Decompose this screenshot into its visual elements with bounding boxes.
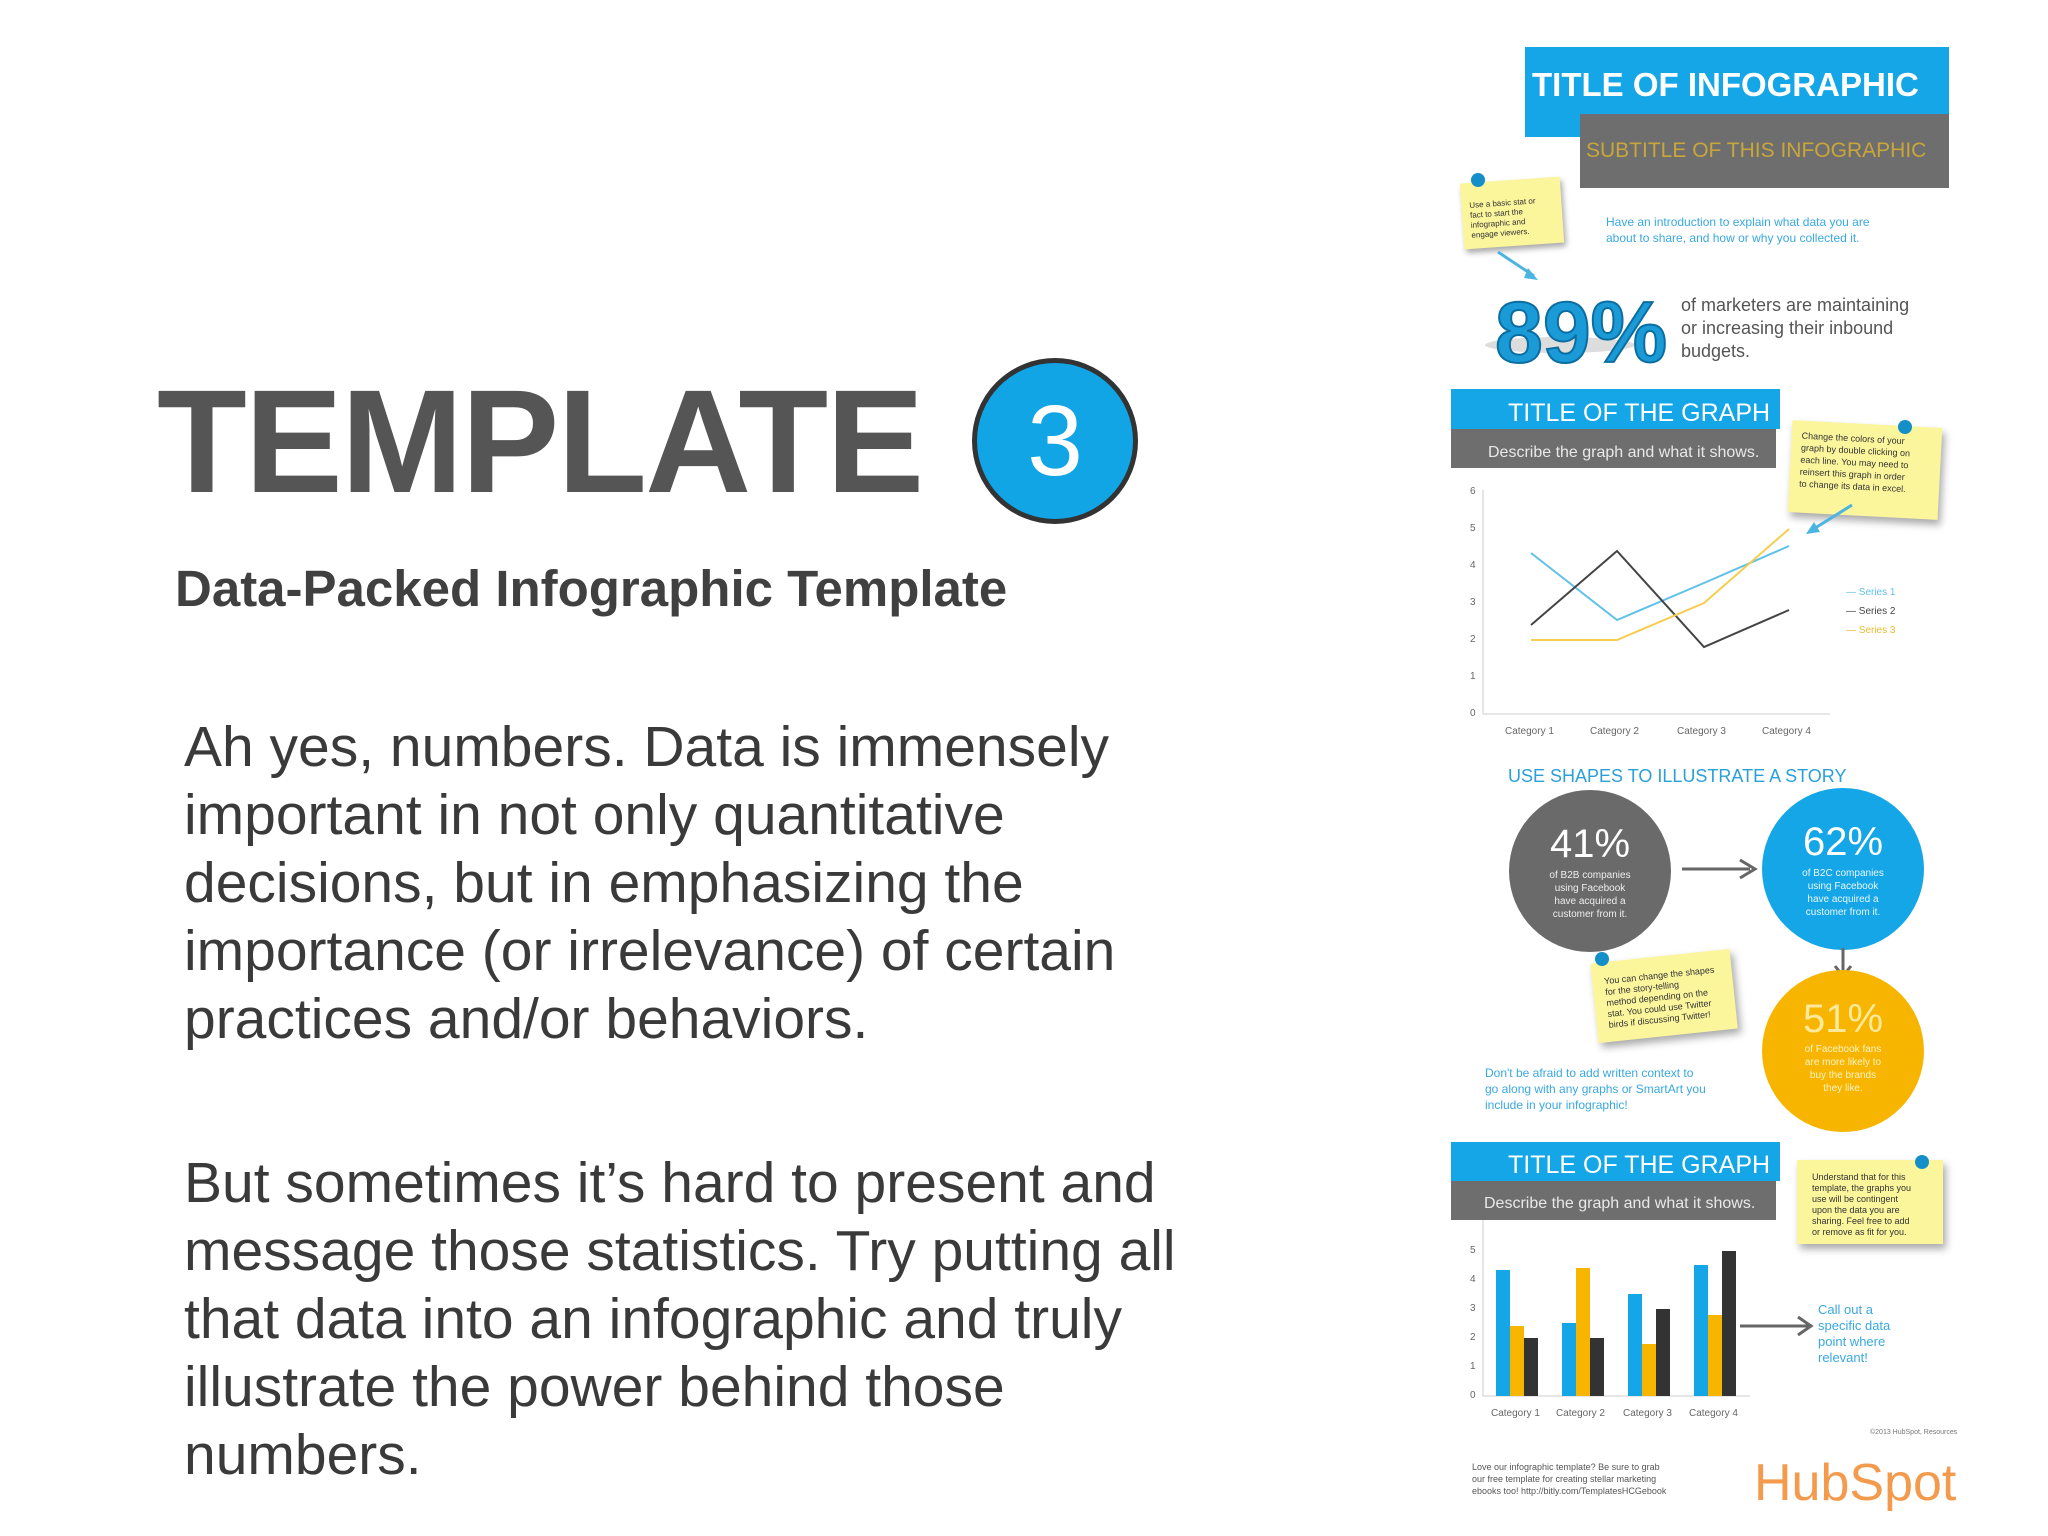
line chart: 2 <box>1470 634 1476 645</box>
logo: HubSpot: HubSpot <box>1754 1454 1957 1512</box>
graph 1 header <box>1451 389 1780 468</box>
context text: go along with any graphs or SmartArt you <box>1485 1082 1706 1096</box>
footer text: Love our infographic template? Be sure to grab <box>1472 1462 1660 1472</box>
circle: 51%: 51% <box>1803 997 1883 1041</box>
bar chart: Category 1 <box>1491 1408 1540 1419</box>
bar chart: Category 2 <box>1556 1408 1605 1419</box>
graph 2 header: Describe the graph and what it shows. <box>1484 1195 1755 1212</box>
circle: 62%: using Facebook <box>1808 881 1879 892</box>
text block: paragraph 2: numbers. <box>184 1423 422 1487</box>
bar chart: 0 <box>1470 1390 1476 1401</box>
text block: paragraph 1: importance (or irrelevance) of certain <box>184 919 1115 983</box>
subtitle: Data-Packed Infographic Template <box>175 560 1007 617</box>
circle: 51%: buy the brands <box>1810 1070 1876 1081</box>
infographic title: TITLE OF INFOGRAPHIC <box>1532 66 1919 103</box>
heading: TEMPLATE: TEMPLATE <box>157 360 922 524</box>
sticky note 4: use will be contingent <box>1812 1194 1899 1204</box>
intro text: Have an introduction to explain what data you are <box>1606 215 1870 229</box>
line chart: — Series 2 <box>1846 606 1896 617</box>
bar chart <box>1470 1220 1750 1419</box>
circle: 41%: have acquired a <box>1554 896 1626 907</box>
text block: paragraph 1: practices and/or behaviors. <box>184 987 868 1051</box>
text block: paragraph 2: illustrate the power behind those <box>184 1355 1005 1419</box>
text block: paragraph 1: important in not only quantitative <box>184 783 1005 847</box>
sticky note 4 <box>1797 1155 1943 1244</box>
sticky note 4: upon the data you are <box>1812 1205 1900 1215</box>
big stat 89%: 89% <box>1495 285 1667 381</box>
line chart: 3 <box>1470 597 1476 608</box>
circle: 51%: of Facebook fans <box>1805 1044 1881 1055</box>
sticky note 1: Use a basic stat or <box>1469 196 1536 210</box>
logo: HubSpot: ©2013 HubSpot, Resources <box>1870 1428 1958 1436</box>
circle: 62% <box>1762 788 1924 950</box>
arrow right <box>1682 860 1755 878</box>
sticky note 4: Understand that for this <box>1812 1172 1906 1182</box>
big stat 89%: or increasing their inbound <box>1681 318 1893 338</box>
bar chart: Category 3 <box>1623 1408 1672 1419</box>
circle: 41%: customer from it. <box>1553 909 1627 920</box>
bar chart: 2 <box>1470 1332 1476 1343</box>
sticky note 3: birds if discussing Twitter! <box>1608 1009 1711 1030</box>
circle: 41%: 41% <box>1550 822 1630 866</box>
big stat 89% <box>1485 285 1909 381</box>
sticky note 2: reinsert this graph in order <box>1800 467 1905 482</box>
arrow callout: point where <box>1818 1334 1885 1349</box>
line chart: — Series 3 <box>1846 625 1896 636</box>
bar chart: 1 <box>1470 1361 1476 1372</box>
bar chart: 3 <box>1470 1303 1476 1314</box>
text block: paragraph 2: that data into an infographic and truly <box>184 1287 1122 1351</box>
circle: 41% <box>1509 790 1671 952</box>
line chart: 4 <box>1470 560 1476 571</box>
sticky note 2 <box>1788 420 1942 534</box>
icon: number badge 3 <box>972 358 1138 524</box>
circle: 51%: they like. <box>1823 1083 1863 1094</box>
text block: paragraph 2: But sometimes it’s hard to present and <box>184 1151 1156 1215</box>
bar chart: Category 4 <box>1689 1408 1738 1419</box>
context text: include in your infographic! <box>1485 1098 1628 1112</box>
sticky note 1: fact to start the <box>1470 207 1524 220</box>
sticky note 1 <box>1460 173 1564 280</box>
arrow down <box>1835 948 1851 976</box>
infographic title <box>1525 47 1949 188</box>
graph 1 header: Describe the graph and what it shows. <box>1488 444 1759 461</box>
sticky note 2: Change the colors of your <box>1801 431 1905 446</box>
graph 2 header: TITLE OF THE GRAPH <box>1508 1151 1770 1179</box>
line chart: — Series 1 <box>1846 587 1896 598</box>
arrow callout <box>1740 1302 1891 1365</box>
arrow callout: Call out a <box>1818 1302 1874 1317</box>
text block: paragraph 1: decisions, but in emphasizing the <box>184 851 1024 915</box>
sticky note 2: to change its data in excel. <box>1799 479 1906 494</box>
sticky note 3 <box>1590 949 1738 1043</box>
line chart <box>1470 486 1896 737</box>
big stat 89%: budgets. <box>1681 341 1750 361</box>
line chart: Category 3 <box>1677 726 1726 737</box>
icon: number badge 3: 3 <box>1027 385 1083 497</box>
sticky note 3: method depending on the <box>1606 987 1708 1008</box>
graph 2 header <box>1451 1142 1780 1220</box>
sticky note 4: or remove as fit for you. <box>1812 1227 1907 1237</box>
text block: paragraph 2 <box>184 1151 1176 1487</box>
circle: 62%: 62% <box>1803 820 1883 864</box>
sticky note 4: sharing. Feel free to add <box>1812 1216 1910 1226</box>
bar chart: 4 <box>1470 1274 1476 1285</box>
section heading: use shapes: USE SHAPES TO ILLUSTRATE A STORY <box>1508 766 1846 786</box>
footer text: ebooks too! http://bitly.com/TemplatesHCGebook <box>1472 1486 1667 1496</box>
big stat 89%: of marketers are maintaining <box>1681 295 1909 315</box>
circle: 41%: using Facebook <box>1555 883 1626 894</box>
text block: paragraph 2: message those statistics. Try putting all <box>184 1219 1176 1283</box>
arrow callout: relevant! <box>1818 1350 1868 1365</box>
line chart: 0 <box>1470 708 1476 719</box>
sticky note 2: each line. You may need to <box>1800 455 1909 470</box>
bar chart: 5 <box>1470 1245 1476 1256</box>
text block: paragraph 1: Ah yes, numbers. Data is immensely <box>184 715 1109 779</box>
sticky note 4: template, the graphs you <box>1812 1183 1911 1193</box>
sticky note 3: for the story-telling <box>1605 979 1679 997</box>
footer text: our free template for creating stellar marketing <box>1472 1474 1656 1484</box>
arrow callout: specific data <box>1818 1318 1891 1333</box>
sticky note 3: You can change the shapes <box>1604 965 1715 986</box>
line chart: 6 <box>1470 486 1476 497</box>
logo: HubSpot <box>1754 1428 1958 1512</box>
circle: 62%: customer from it. <box>1806 907 1880 918</box>
line chart: Category 1 <box>1505 726 1554 737</box>
circle: 62%: of B2C companies <box>1802 868 1884 879</box>
line chart: 5 <box>1470 523 1476 534</box>
sticky note 2: graph by double clicking on <box>1801 443 1910 458</box>
intro text: about to share, and how or why you collected it. <box>1606 231 1859 245</box>
line chart: Category 4 <box>1762 726 1811 737</box>
text block: paragraph 1 <box>184 715 1115 1051</box>
circle: 41%: of B2B companies <box>1549 870 1631 881</box>
context text: Don't be afraid to add written context to <box>1485 1066 1694 1080</box>
graph 1 header: TITLE OF THE GRAPH <box>1508 399 1770 427</box>
circle: 51%: are more likely to <box>1805 1057 1882 1068</box>
circle: 51% <box>1762 970 1924 1132</box>
line chart: 1 <box>1470 671 1476 682</box>
sticky note 3: stat. You could use Twitter <box>1607 998 1712 1019</box>
circle: 62%: have acquired a <box>1807 894 1879 905</box>
sticky note 1: infographic and <box>1470 217 1526 230</box>
line chart: Category 2 <box>1590 726 1639 737</box>
infographic title: SUBTITLE OF THIS INFOGRAPHIC <box>1586 139 1926 162</box>
sticky note 1: engage viewers. <box>1471 227 1530 240</box>
